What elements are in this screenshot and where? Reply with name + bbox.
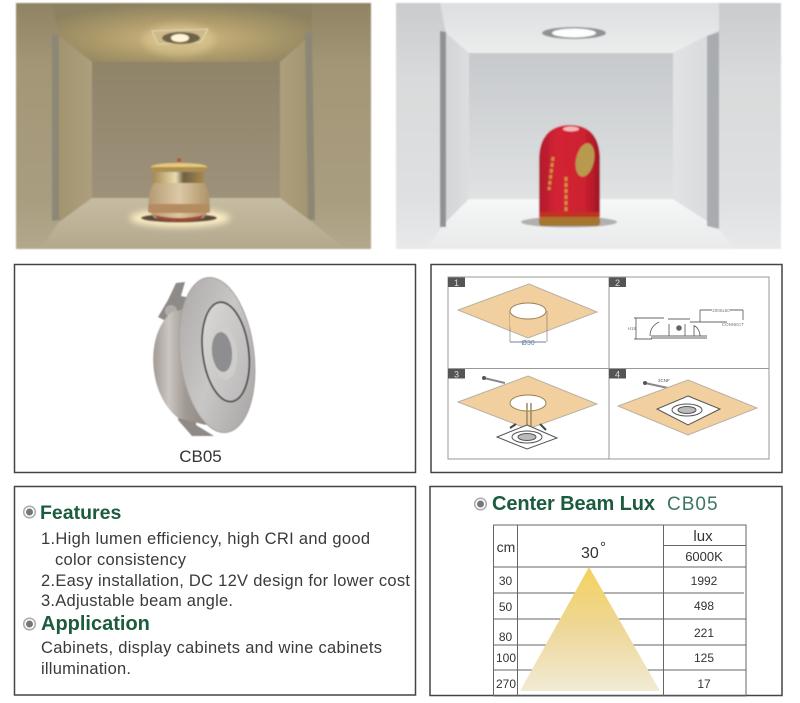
- photo: white cabinet with red bottle: [396, 3, 781, 249]
- icon: application bullet: [24, 618, 35, 630]
- lux table: cm: [497, 539, 515, 555]
- application text: illumination.: [41, 660, 131, 678]
- panel: product image: [14, 264, 416, 472]
- features list: [41, 530, 410, 610]
- panel: center beam lux: [430, 486, 782, 696]
- photo: warm cabinet with pot: [16, 3, 371, 249]
- step 3: insert fixture: [448, 369, 597, 449]
- step 2: dimensions drawing: [609, 278, 744, 339]
- lamp plate: [143, 24, 215, 56]
- lux table: 6000K: [685, 549, 723, 564]
- lux table: [494, 525, 746, 696]
- step 1: cut hole: Ø30: [521, 340, 535, 347]
- step 2: dimensions drawing: 2000±50: [712, 308, 730, 313]
- step 1: cut hole: [448, 278, 597, 347]
- icon: features bullet: [24, 506, 35, 518]
- lux table: 1992: [691, 574, 718, 588]
- shadow: [521, 216, 617, 228]
- lux table: °: [600, 539, 606, 556]
- application text: Cabinets, display cabinets and wine cabinets: [41, 639, 382, 657]
- light pool: [130, 209, 230, 227]
- lux table: 498: [694, 599, 714, 613]
- product label: CB05: [179, 447, 222, 466]
- icon: lux bullet: [475, 498, 486, 510]
- lux table: 270: [496, 677, 516, 691]
- beam angle: 30: [581, 545, 599, 562]
- icon: CB05 downlight: [153, 273, 263, 437]
- step 2: dimensions drawing: CONNECT: [722, 322, 744, 327]
- beam cone: [520, 567, 660, 691]
- features list: 1.High lumen efficiency, high CRI and good: [41, 530, 370, 548]
- step 4: installed fixture: [609, 369, 757, 435]
- step 4: installed fixture: 4: [615, 370, 620, 380]
- features list: 2.Easy installation, DC 12V design for lower cost: [41, 572, 410, 590]
- step 2: dimensions drawing: H18: [628, 326, 636, 331]
- panel: features and application: [14, 486, 416, 695]
- features list: color consistency: [55, 551, 187, 569]
- step 3: insert fixture: 3: [454, 370, 459, 380]
- model label: CB05: [667, 494, 719, 515]
- features list: 3.Adjustable beam angle.: [41, 592, 233, 610]
- lux table: 221: [694, 626, 714, 640]
- step 1: cut hole: 1: [454, 278, 459, 288]
- bottle: [539, 125, 600, 212]
- step 2: dimensions drawing: 2: [615, 278, 620, 288]
- lux table: 17: [697, 677, 711, 691]
- heading: application: Application: [41, 613, 150, 635]
- pot: [153, 172, 204, 183]
- lux table: lux: [693, 528, 713, 545]
- lux table: 100: [496, 651, 516, 665]
- lux table: 80: [499, 630, 512, 644]
- heading: features: Features: [40, 502, 121, 524]
- lux table: 50: [499, 600, 512, 614]
- lux table: 30: [499, 574, 512, 588]
- lux table: 125: [694, 651, 714, 665]
- application text: [41, 639, 382, 678]
- lamp: [542, 27, 606, 39]
- heading: center beam lux: Center Beam Lux: [492, 493, 655, 515]
- panel: installation steps: [431, 264, 782, 472]
- step 4: installed fixture: 2CNF: [658, 378, 670, 383]
